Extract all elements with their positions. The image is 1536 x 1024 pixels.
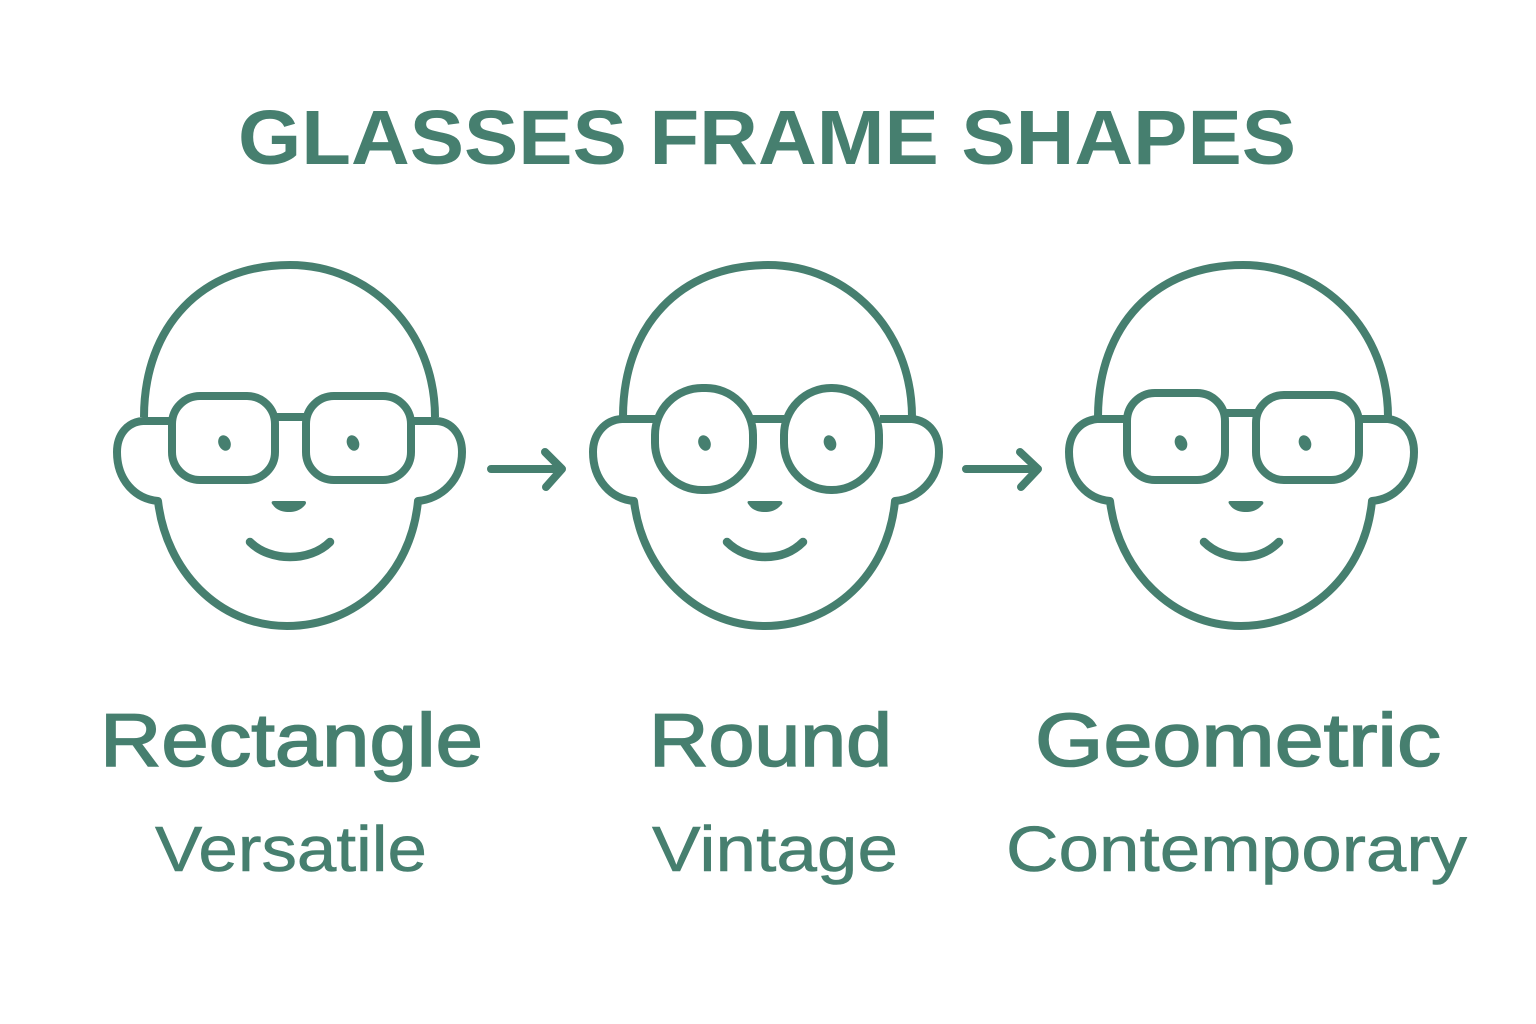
face: geometric glasses — [1069, 265, 1414, 626]
label: Geometric: Geometric — [1035, 698, 1441, 782]
nose — [1228, 501, 1263, 512]
glasses: geometric — [1127, 393, 1359, 480]
sublabel: Contemporary: Contemporary — [1006, 813, 1467, 885]
eyes — [696, 433, 839, 453]
sublabel: Versatile: Versatile — [155, 813, 427, 885]
arrow: round to geometric — [966, 452, 1038, 487]
mouth — [250, 542, 330, 557]
head outline — [593, 265, 939, 626]
glasses: round — [655, 388, 879, 490]
title: GLASSES FRAME SHAPES — [238, 95, 1296, 181]
face: round glasses — [593, 265, 939, 626]
eyes — [1172, 433, 1314, 453]
glasses: rectangle — [172, 396, 411, 480]
sublabel: Vintage: Vintage — [652, 813, 898, 885]
head outline — [1069, 265, 1414, 626]
mouth — [727, 542, 803, 557]
nose — [748, 501, 782, 512]
arrow: rectangle to round — [491, 452, 562, 487]
label: Rectangle: Rectangle — [100, 698, 483, 782]
eyes — [216, 433, 362, 453]
nose — [272, 501, 306, 512]
head outline — [117, 265, 462, 626]
mouth — [1204, 542, 1279, 557]
label: Round: Round — [649, 698, 892, 782]
face: rectangle glasses — [117, 265, 462, 626]
